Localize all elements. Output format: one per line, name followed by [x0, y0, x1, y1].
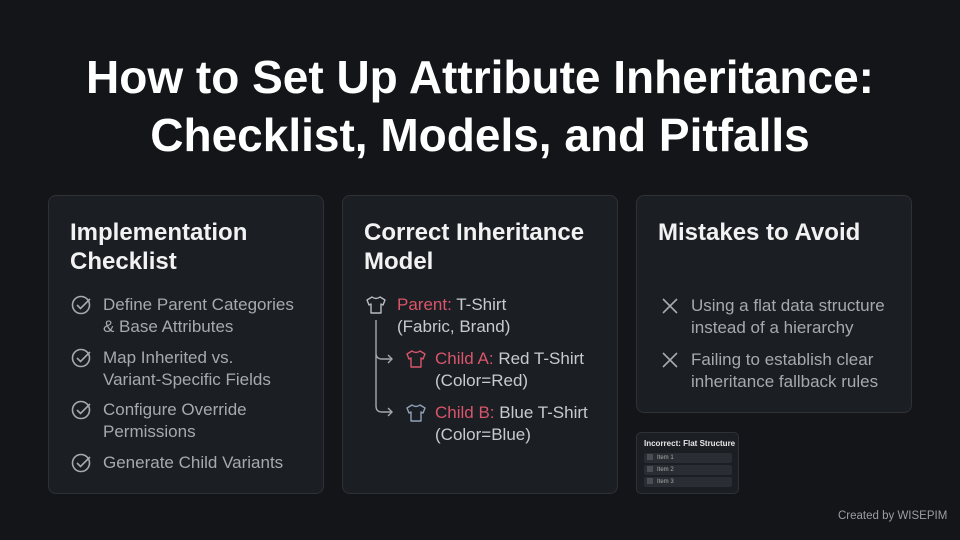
heading: checklist: Implementation — [70, 219, 247, 246]
item 2: Map Inherited vs. — [103, 348, 233, 367]
panel: mistakes — [636, 195, 912, 413]
child B: Child B: Blue T-Shirt — [435, 403, 588, 422]
parent node: (Fabric, Brand) — [397, 317, 510, 336]
heading: model: Model — [364, 248, 433, 275]
card: flat structure — [636, 432, 739, 494]
heading: model — [364, 219, 584, 275]
parent node: Parent: T-Shirt — [397, 295, 506, 314]
item 3: Permissions — [103, 422, 196, 441]
parent node — [366, 295, 510, 336]
title: Checklist, Models, and Pitfalls — [150, 109, 810, 161]
tree lines — [375, 320, 393, 416]
mistake 2: Failing to establish clear — [691, 350, 873, 369]
item 2 — [72, 348, 271, 389]
item 4: Generate Child Variants — [103, 453, 283, 472]
heading: model: Correct Inheritance — [364, 219, 584, 246]
heading: checklist — [70, 219, 247, 275]
item 3 — [72, 400, 247, 441]
title — [86, 51, 874, 161]
child B — [406, 403, 588, 444]
child A: (Color=Red) — [435, 371, 528, 390]
child A: Child A: Red T-Shirt — [435, 349, 584, 368]
mistake 1 — [662, 296, 885, 337]
item 1 — [72, 295, 294, 336]
item 2: Variant-Specific Fields — [103, 370, 271, 389]
panel: checklist — [48, 195, 324, 494]
rows — [644, 453, 732, 463]
mistake 2: inheritance fallback rules — [691, 372, 878, 391]
item 3: Configure Override — [103, 400, 247, 419]
heading: checklist: Checklist — [70, 248, 177, 275]
mistake 2 — [662, 350, 878, 391]
item 1: Define Parent Categories — [103, 295, 294, 314]
mistake 1: Using a flat data structure — [691, 296, 885, 315]
item 1: & Base Attributes — [103, 317, 233, 336]
card: flat structure: Incorrect: Flat Structure — [644, 439, 735, 448]
title: How to Set Up Attribute Inheritance: — [86, 51, 874, 103]
child A — [406, 349, 584, 390]
panel: model — [342, 195, 618, 494]
child B: (Color=Blue) — [435, 425, 531, 444]
card: flat structure: Item 3 — [657, 479, 674, 485]
credit: Created by WISEPIM — [838, 510, 947, 522]
heading: mistakes: Mistakes to Avoid — [658, 219, 860, 246]
mistake 1: instead of a hierarchy — [691, 318, 854, 337]
rows: Item 1 — [657, 455, 674, 461]
card: flat structure: Item 2 — [657, 467, 674, 473]
